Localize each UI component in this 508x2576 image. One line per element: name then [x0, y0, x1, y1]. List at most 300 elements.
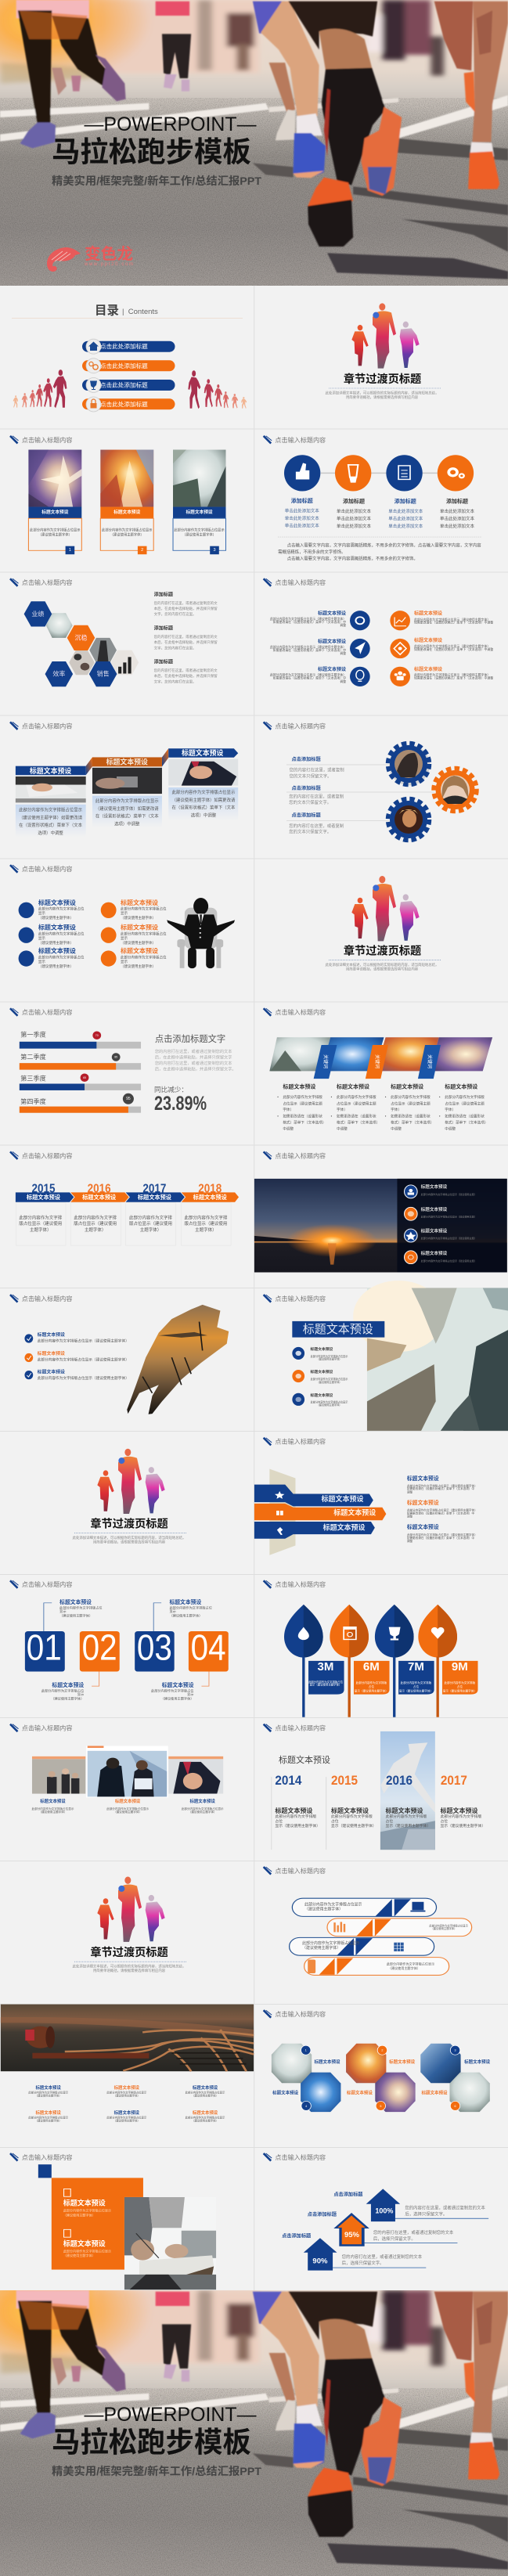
orange circles column: （建议使用主题字体） [121, 940, 156, 946]
gear: blue top [388, 744, 430, 786]
arrow 100%: 后，选择只保留文字。 [405, 2210, 447, 2217]
panel: quarterly bars [10, 1008, 236, 1115]
column 2: 标题文本预设 [337, 1083, 369, 1090]
upper labels: 标题文本预设 [59, 1598, 92, 1605]
arrow 100%: 100% [375, 2207, 394, 2215]
bar: Q1: 第一季度 [20, 1031, 46, 1039]
slide header: 点击输入标题内容 [275, 2010, 326, 2018]
column 4: 如需更改请在（设置形状 [445, 1113, 485, 1119]
panel: ribbon arrows [254, 1438, 477, 1555]
column 2015: 显示（建议使用主题字体） [331, 1823, 376, 1828]
lower labels: 此部分内容作为文字排版占位 [151, 1688, 194, 1694]
keyword tags: 关键词 [427, 1054, 433, 1068]
icon: seated businessman [167, 898, 235, 968]
logo [47, 244, 133, 272]
body text: 后，在此框中选择粘贴，并选择只保留文字。 [155, 1066, 236, 1072]
octagon pair 3: 标题文本预设 [464, 2059, 491, 2065]
list items: （建议使用主题字体） [317, 1356, 341, 1360]
column 1: 如需更改请在（设置形状 [283, 1113, 322, 1119]
octagon pair 3: 6 [454, 2104, 456, 2108]
step 3: 此部分内容作为文字排版占位显示 [171, 789, 236, 795]
column 2: • [331, 1095, 333, 1099]
column 2016: 标题文本预设 [386, 1807, 423, 1814]
logo: www.ppt20.com [84, 262, 133, 267]
sunset photo [254, 1179, 507, 1272]
hexagon: 沉稳: 沉稳 [74, 633, 87, 641]
panel: chapter slide 3 [73, 1449, 186, 1544]
panel: octagon photos [264, 2010, 491, 2112]
paragraph: 需概括精炼，不用多余的文字修饰。 [278, 549, 345, 555]
leaf 6M: 占位 [369, 1684, 374, 1688]
right items [390, 611, 493, 686]
orange circles column: （建议使用主题字体） [121, 964, 156, 969]
text boxes: 主题字体） [85, 1227, 106, 1233]
text list: 您的内容打在这里，或者通过复制您的文 [154, 668, 218, 673]
text list: 您的内容打在这里，或者通过复制您的文 [154, 600, 218, 606]
rail photo [1, 2005, 254, 2071]
column text: 单击此处添加文本 [440, 523, 475, 529]
text list: 添加标题 [154, 625, 173, 631]
leaf 9M: 此部分内容作为文字排版 [445, 1681, 475, 1684]
ribbon descriptions: 此部分内容作为文字排版占位显示（建议使用主题字体） [407, 1508, 477, 1512]
column 2016: 占位 [386, 1818, 393, 1824]
column 1: 格式）菜单下（文本选项） [283, 1119, 326, 1125]
step 2: （建议使用主题字体）如需更改请 [95, 805, 159, 812]
arrow 90% [282, 2233, 423, 2271]
caption row 2: （建议使用主题字体） [192, 2118, 218, 2122]
ribbon descriptions: 标题文本预设 [407, 1475, 439, 1482]
column text: 单击此处添加文本 [337, 508, 371, 514]
slide header: 点击输入标题内容 [22, 2153, 72, 2161]
step 1: 在（设置形状格式）菜单下（文本 [19, 822, 83, 828]
caption row 2: 此部分内容作为文字排版占位显示 [186, 2116, 225, 2120]
gear: blue bottom [388, 798, 429, 841]
bar: Q3 [20, 1074, 141, 1090]
orange block: （建议使用主题字体） [63, 2212, 95, 2217]
slide header: 点击输入标题内容 [22, 722, 72, 730]
column text: 单击此处添加文本 [388, 508, 423, 514]
step 2: 选项）中调整 [114, 820, 140, 827]
panel: chapter slide 4 [73, 1877, 186, 1973]
octagon pair 2: 标题文本预设 [347, 2089, 373, 2095]
capsule 3: （建议使用主题字体） [302, 1945, 340, 1951]
photo strip [269, 1037, 492, 1071]
column 2 [331, 1083, 380, 1132]
left items: 此部分内容作为文字排版占位显示（建议使用主题字体） [270, 645, 346, 649]
blue circles column: 显示 [38, 936, 45, 940]
panel: year timeline [264, 1724, 485, 1850]
brush-shaped sunset photo [127, 1305, 229, 1414]
column 4: 中调整 [445, 1126, 456, 1132]
check list: 此部分内容作为文字排版占位显示（建议使用主题字体） [38, 1375, 129, 1381]
check list: 标题文本预设 [38, 1368, 65, 1374]
list items: （建议使用主题字体） [317, 1380, 341, 1384]
captions: 此部分内容作为文字排版占位显示 [32, 1807, 74, 1810]
arrow banners [16, 1192, 239, 1202]
column text: 单击此处添加文本 [337, 516, 371, 522]
left items: 调整 [340, 623, 346, 627]
caption row 2: 此部分内容作为文字排版占位显示 [28, 2116, 69, 2120]
right items: 如需更改请在（设置形状格式）菜单下（文本选项）中调整 [414, 647, 493, 651]
column 2014: 标题文本预设 [275, 1807, 312, 1814]
blue circles column: （建议使用主题字体） [38, 915, 74, 921]
left items [270, 611, 370, 686]
arrow 90%: 您的内容打在这里，或者通过复制您的文本 [342, 2254, 423, 2260]
lower labels: （建议使用主题字体） [51, 1695, 84, 1701]
capsule 2: （建议使用主题字体） [431, 1926, 456, 1930]
column titles: 添加标题 [343, 498, 365, 505]
check list: 标题文本预设 [38, 1331, 65, 1338]
chapter description: 用简要单语概括，请根据需要选择填写相应内容 [346, 967, 419, 972]
orange circles column: 标题文本预设 [121, 899, 158, 906]
octagon pair 3: 标题文本预设 [422, 2089, 448, 2095]
left runner crowd [13, 369, 67, 408]
paragraph: 点击输入需要文字内容，文字内容需概括精炼，不用多余的文字修饰。 [287, 556, 418, 562]
panel: four icon circles [264, 436, 481, 562]
step 2: 标题文本预设 [106, 757, 148, 766]
step 3: 标题文本预设 [182, 748, 223, 757]
arrow banners: 标题文本预设 [82, 1194, 116, 1201]
column 4: 标题文本预设 [445, 1083, 477, 1090]
card 1: 此部分内容作为文字排版占位显示 [30, 527, 81, 532]
blue circles column: 此部分内容作为文字排版占位 [38, 906, 85, 912]
column 4: 占位显示（建议使用主题 [445, 1101, 485, 1106]
cover subtitle: 精美实用/框架完整/新年工作/总结汇报PPT [52, 175, 261, 187]
card 2: （建议使用主题字体） [110, 531, 144, 537]
runner trio [97, 1877, 165, 1942]
column 3 [385, 1083, 434, 1132]
column 4: 格式）菜单下（文本选项） [445, 1119, 488, 1125]
upper labels: 标题文本预设 [169, 1598, 201, 1605]
slide header: 点击输入标题内容 [275, 1151, 326, 1159]
column 4: • [439, 1114, 441, 1118]
column 2: 此部分内容作为文字排版 [337, 1094, 376, 1100]
gear labels: 点击添加标题 [292, 785, 321, 791]
bar: Q1 [20, 1031, 141, 1049]
octagon pair 1: 标题文本预设 [315, 2059, 340, 2065]
chapter description [73, 1964, 186, 1973]
lower labels: 显示 [187, 1692, 194, 1696]
orange circles column: 标题文本预设 [121, 924, 158, 931]
bar: Q4 [20, 1093, 141, 1113]
check list [24, 1331, 129, 1381]
text list: 文字。您的内容打在这里。 [154, 611, 196, 617]
hexagon: 业绩: 业绩 [31, 610, 44, 618]
step 2 [92, 757, 162, 827]
list items: 此部分内容作为文字排版占位显示 [311, 1377, 348, 1381]
orange circles column: 标题文本预设 [121, 947, 158, 955]
chapter title: 章节过渡页标题 [90, 1517, 168, 1530]
ribbon 1 [254, 1485, 373, 1506]
arrow 90%: 后，选择只保留文字。 [342, 2260, 384, 2266]
contents item 4 [82, 397, 175, 412]
body text: 您的内容打在这里，或者通过复制您的文本 [155, 1048, 232, 1054]
contents item 1: 点击此处添加标题 [100, 342, 148, 350]
left items: 调整 [340, 651, 346, 655]
column text: 单击此处添加文本 [440, 516, 475, 522]
chapter description [326, 390, 438, 400]
list items: 此部分内容作为文字排版占位显示 [311, 1400, 348, 1404]
gear labels: 您的文本只保留文字。 [290, 773, 332, 780]
title box [292, 1321, 384, 1338]
caption row 2: 标题文本预设 [193, 2109, 218, 2116]
orange circles column: 显示 [121, 911, 128, 915]
panel: hexagon cluster [10, 578, 218, 686]
right items: 此部分内容作为文字排版占位显示（建议使用主题字体） [414, 618, 490, 621]
card 1 [28, 450, 81, 554]
octagon pair 1: 1 [305, 2048, 308, 2052]
right items: 此部分内容作为文字排版占位显示（建议使用主题字体） [414, 673, 490, 677]
text boxes: 此部分内容作为文字排 [19, 1214, 63, 1220]
octagon pair 2: 2 [381, 2048, 384, 2052]
text boxes: 主题字体） [140, 1227, 161, 1233]
column 2014: 占位 [275, 1818, 283, 1824]
panel: numbered squares [10, 1580, 229, 1701]
arrow 100%: 点击添加标题 [333, 2191, 363, 2197]
column 2015: 占位 [331, 1818, 339, 1824]
column 2: • [331, 1114, 333, 1118]
card 1: 1 [69, 548, 71, 553]
captions [32, 1798, 224, 1814]
orange block: （建议使用主题字体） [63, 2253, 95, 2257]
column 3: 标题文本预设 [391, 1083, 423, 1090]
ribbon descriptions: 标题文本预设 [407, 1499, 439, 1506]
slide header: 点击输入标题内容 [275, 2153, 326, 2161]
panel: stepped banners [10, 722, 238, 837]
chapter description [326, 962, 438, 972]
panel: rail track photo [1, 2005, 254, 2122]
column titles: 添加标题 [291, 497, 313, 504]
column 2017 [440, 1773, 485, 1828]
ribbon descriptions: 调整 [407, 1515, 413, 1519]
text boxes: 主题字体） [195, 1227, 217, 1233]
column 3: 此部分内容作为文字排版 [391, 1094, 431, 1100]
bar: Q2: 第二季度 [20, 1053, 46, 1061]
captions: 标题文本预设 [190, 1798, 215, 1804]
column 2014: 2014 [275, 1773, 302, 1788]
panel: brush stroke photo [10, 1295, 229, 1414]
column 3: • [385, 1114, 387, 1118]
slide header: 点击输入标题内容 [22, 578, 72, 586]
bar: Q4: 95 [126, 1097, 131, 1101]
orange block: 标题文本预设 [63, 2239, 106, 2248]
chapter description [73, 1535, 186, 1544]
bar: Q4: 第四季度 [20, 1097, 46, 1105]
left items: 如需更改请在（设置形状格式）菜单下（文本选项）中 [273, 620, 346, 624]
slide header: 点击输入标题内容 [275, 578, 326, 586]
leaf 7M: 7M [408, 1660, 424, 1673]
ribbon descriptions: 如需更改请在（设置形状格式）菜单下（文本选项）中 [407, 1536, 475, 1540]
column 3: 如需更改请在（设置形状 [391, 1113, 431, 1119]
column 2: 字体） [337, 1107, 348, 1112]
arrow 90%: 90% [312, 2257, 328, 2266]
gear labels: 您的文本只保留文字。 [289, 829, 331, 835]
arrow 95%: 点击添加标题 [308, 2211, 337, 2218]
closing photo: marathon runners legs [0, 2249, 508, 2576]
slide header: 点击输入标题内容 [22, 436, 72, 444]
lower labels [41, 1681, 194, 1701]
card 1: 标题文本预设 [41, 509, 69, 515]
card 3: 此部分内容作为文字排版占位显示 [174, 527, 225, 532]
hexagon photos [46, 613, 139, 675]
bar: Q3: 65 [83, 1076, 86, 1079]
closing overline: —POWERPOINT— [85, 2404, 257, 2426]
column 2: 占位显示（建议使用主题 [337, 1101, 376, 1106]
column 4: 此部分内容作为文字排版 [445, 1094, 485, 1100]
panel: chapter slide 1 [326, 303, 441, 400]
column 2015: 标题文本预设 [331, 1807, 369, 1814]
capsule 4: （建议使用主题字体） [388, 1965, 420, 1970]
upper labels [59, 1598, 212, 1618]
step 1 [16, 766, 86, 837]
captions: 标题文本预设 [40, 1798, 66, 1804]
arrow 95%: 后，选择只保留文字。 [373, 2236, 416, 2242]
right items: 如需更改请在（设置形状格式）菜单下（文本选项）中调整 [414, 621, 493, 625]
photo: business people [86, 1746, 168, 1797]
column 4: 字体） [445, 1107, 456, 1112]
captions: 此部分内容作为文字排版占位显示 [182, 1807, 224, 1810]
card 2 [100, 450, 153, 554]
closing title: 马拉松跑步模板 [52, 2426, 251, 2458]
cover photo: marathon runners legs [0, 0, 508, 286]
ribbon 1: 标题文本预设 [321, 1494, 363, 1503]
caption row 1: 标题文本预设 [114, 2084, 140, 2091]
step 3: （建议使用主题字体）如需更改请 [171, 797, 236, 803]
body text: 后，在此框中选择粘贴，并选择只保留文字 [155, 1054, 232, 1061]
body text: 您的内容打在这里，或者通过复制您的文本 [155, 1060, 232, 1066]
list items: （建议使用主题字体） [317, 1403, 341, 1407]
circle: clipboard [386, 455, 423, 492]
gear labels: 点击添加标题 [292, 812, 321, 818]
panel: gear portraits [264, 722, 477, 841]
orange block: 此部分内容作为文字排版占位显示 [63, 2249, 111, 2254]
column 1: • [277, 1095, 279, 1099]
arrow banners: 标题文本预设 [138, 1194, 171, 1201]
lower labels: 标题文本预设 [162, 1681, 194, 1688]
hexagon: 销售 [89, 661, 117, 686]
arrow 100% [333, 2189, 485, 2221]
year labels: 2017 [142, 1182, 167, 1195]
octagon pair 2: 5 [380, 2104, 382, 2108]
orange block: 标题文本预设 [63, 2199, 106, 2207]
column text: 单击此处添加文本 [388, 516, 423, 522]
captions: 此部分内容作为文字排版占位显示 [106, 1807, 149, 1810]
column 2: 如需更改请在（设置形状 [337, 1113, 376, 1119]
card 3 [173, 450, 225, 554]
card 2: 此部分内容作为文字排版占位显示 [102, 527, 153, 532]
leaf 7M [375, 1605, 434, 1717]
slide header: 点击输入标题内容 [275, 436, 326, 444]
upper labels: 显示 [169, 1609, 176, 1613]
caption row 2: （建议使用主题字体） [113, 2118, 140, 2122]
big percentage: 23.89% [154, 1093, 207, 1115]
column 1: 字体） [283, 1107, 294, 1112]
bar: Q2: 85 [114, 1055, 117, 1058]
left items: 标题文本预设 [318, 611, 346, 617]
leaf 7M: 显示（建议使用主题字体） [399, 1688, 433, 1692]
panel: building photo list [264, 1281, 508, 1431]
orange block: 此部分内容作为文字排版占位显示 [63, 2208, 111, 2213]
hexagon: 效率 [45, 661, 73, 686]
text list: 添加标题 [154, 659, 173, 665]
chapter description: 此处添加详细文本描述，可以根据你的实际标题的内容，适当简短地总结， [73, 1964, 186, 1969]
orange block [52, 2178, 143, 2270]
column 3: 占位显示（建议使用主题 [391, 1101, 431, 1106]
slide header: 点击输入标题内容 [22, 1151, 72, 1159]
panel: yearly arrows [10, 1151, 239, 1245]
ribbon descriptions: 此部分内容作为文字排版占位显示（建议使用主题字体） [407, 1533, 477, 1537]
blue circles column: 标题文本预设 [38, 899, 76, 906]
arrow 90%: 点击添加标题 [282, 2233, 312, 2239]
leaf 6M: 此部分内容作为文字排版 [356, 1681, 387, 1684]
blue circles column: （建议使用主题字体） [38, 940, 74, 946]
text boxes: 版占位显示（建议使用 [129, 1220, 172, 1227]
photo: thumbs up [168, 1756, 223, 1794]
gear: orange [434, 769, 477, 811]
step 3: 在（设置形状格式）菜单下（文本 [171, 805, 236, 811]
caption row 1: 标题文本预设 [35, 2084, 61, 2091]
panel: six icon items [264, 578, 493, 686]
list items: 此部分内容作为文字排版占位显示（建议使用主题） [421, 1214, 477, 1218]
panel: circles and seated figure [10, 865, 235, 969]
leaf 6M: 6M [363, 1660, 380, 1673]
square 01: 01 [27, 1627, 62, 1668]
arrow banners: 标题文本预设 [193, 1194, 227, 1201]
list items: 标题文本预设 [311, 1369, 333, 1374]
chapter title: 章节过渡页标题 [90, 1946, 168, 1959]
slide header: 点击输入标题内容 [22, 865, 72, 873]
column 2016 [386, 1773, 431, 1828]
list items [405, 1184, 477, 1264]
column 2014: 显示（建议使用主题字体） [275, 1823, 320, 1828]
contents subtitle: | Contents [122, 308, 158, 316]
slide header: 点击输入标题内容 [22, 1580, 72, 1588]
blue circles column: 标题文本预设 [38, 924, 76, 931]
column 2017: 标题文本预设 [440, 1807, 477, 1814]
list items: 此部分内容作为文字排版占位显示（建议使用主题） [421, 1192, 477, 1196]
leaf 6M: 显示（建议使用主题字体） [355, 1688, 388, 1692]
upper labels: 显示 [59, 1609, 67, 1613]
column 2014: 此部分内容作为文字排版 [275, 1814, 316, 1819]
skyscraper photo [353, 1281, 508, 1431]
captions: （建议使用主题字体） [113, 1810, 142, 1814]
column titles [291, 497, 468, 505]
slide header: 点击输入标题内容 [22, 1008, 72, 1016]
logo: 变色龙 [85, 244, 133, 263]
hexagon: 业绩 [24, 601, 52, 626]
leaf 7M: 此部分内容作为文字排版 [401, 1681, 432, 1684]
column text: 单击此处添加文本 [440, 508, 475, 514]
column 3: • [385, 1095, 387, 1099]
upper labels: 此部分内容作为文字排版占位 [59, 1605, 103, 1610]
body text [155, 1048, 236, 1072]
column titles: 添加标题 [446, 498, 468, 505]
arrow 95% [308, 2211, 454, 2246]
right items: 此部分内容作为文字排版占位显示（建议使用主题字体） [414, 644, 490, 648]
caption row 1: （建议使用主题字体） [113, 2093, 140, 2097]
bar: Q1: 70 [95, 1034, 99, 1037]
ribbon 3 [254, 1522, 375, 1539]
column text: 单击此处添加文本 [337, 523, 371, 529]
panel: percentage house arrows [264, 2153, 488, 2271]
blue circles column: 显示 [38, 960, 45, 964]
text boxes: 此部分内容作为文字排 [74, 1214, 117, 1220]
list items: 此部分内容作为文字排版占位显示（建议使用主题） [421, 1236, 477, 1240]
right items: 标题文本预设 [414, 611, 442, 617]
blue circles column: 标题文本预设 [38, 947, 76, 955]
hexagon: 销售: 销售 [97, 670, 110, 678]
cover title: 马拉松跑步模板 [52, 136, 251, 168]
